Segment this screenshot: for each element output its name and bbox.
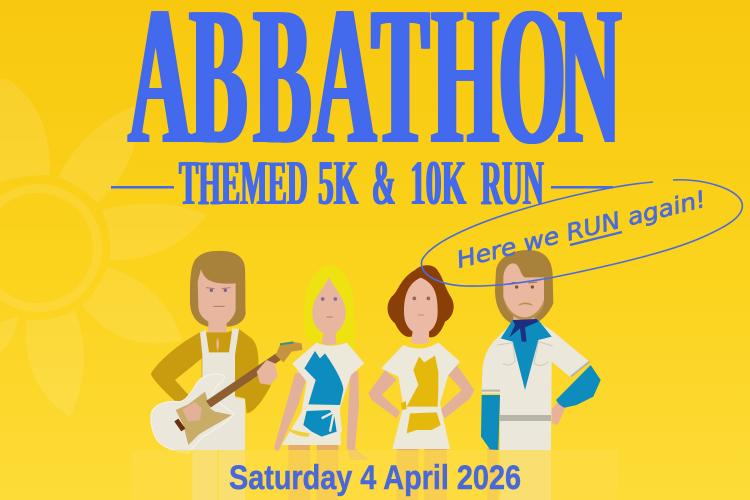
- face and neck: [198, 269, 236, 336]
- hair: [190, 251, 246, 327]
- date band: [132, 450, 618, 500]
- figures: blonde and brunette singers: [274, 264, 474, 500]
- blue shirt and collar: [501, 320, 552, 390]
- yellow stripe: [287, 428, 310, 437]
- legs: [192, 448, 245, 500]
- right cuff: [556, 365, 601, 408]
- slogan underline: [570, 232, 622, 245]
- figure: guitarist: [151, 251, 302, 500]
- date: Saturday 4 April 2026: [229, 459, 521, 497]
- shirt and sleeves: [151, 329, 271, 413]
- face and neck: [312, 277, 346, 345]
- beard and moustache: [503, 297, 544, 320]
- flower watermark: [0, 79, 207, 417]
- brunette singer: [368, 265, 474, 500]
- guitar body: [151, 374, 234, 453]
- eyes and mouth: [206, 288, 230, 306]
- slogan: Here we RUN again!: [454, 187, 709, 274]
- neck: [208, 357, 278, 404]
- tuners: [280, 342, 293, 344]
- eyes and mouth: [321, 297, 337, 317]
- lapels: [497, 342, 553, 365]
- eyes and mouth: [412, 296, 430, 315]
- fretting hand: [257, 360, 278, 385]
- waist tie: [322, 410, 341, 432]
- subtitle text: 10K: [410, 148, 466, 218]
- blue cat print: [303, 351, 343, 437]
- subtitle text: RUN: [481, 148, 544, 218]
- hand: [552, 403, 565, 425]
- neck: [513, 315, 535, 332]
- headstock: [276, 342, 302, 362]
- bridge: [176, 420, 183, 430]
- subtitle text: &: [372, 148, 396, 218]
- suit: [482, 322, 589, 450]
- hair: [388, 265, 454, 337]
- legs: [397, 449, 447, 500]
- arms: [368, 365, 474, 418]
- belt: [500, 415, 551, 421]
- legs: [500, 448, 551, 500]
- blonde singer: [274, 264, 370, 500]
- face and neck: [404, 278, 438, 344]
- hand-drawn ellipse: [422, 180, 742, 286]
- subtitle text: THEMED: [179, 148, 308, 218]
- left cuff: [481, 395, 500, 450]
- guitar: [151, 342, 302, 453]
- figure: bearded man: [481, 250, 601, 500]
- gold cat print: [401, 356, 441, 433]
- arms: [274, 372, 370, 460]
- dress: [282, 342, 364, 445]
- left hand: [487, 448, 498, 500]
- legs: [288, 445, 338, 500]
- subtitle text: [178, 148, 544, 218]
- face: [503, 263, 544, 318]
- sleeve stripes: [482, 362, 589, 391]
- pickguard: [176, 392, 232, 445]
- neck scarf: [509, 319, 538, 342]
- keyhole: [216, 338, 219, 352]
- hair: [304, 264, 355, 362]
- apron: [192, 328, 245, 450]
- subtitle text: 5K: [318, 148, 358, 218]
- title: [127, 0, 622, 185]
- subtitle right rule: [551, 186, 613, 188]
- hair: [495, 250, 553, 323]
- dress: [381, 342, 460, 449]
- strumming hand: [182, 402, 202, 422]
- eyes and brows: [512, 282, 537, 289]
- callout: here we run again: [422, 180, 742, 286]
- subtitle left rule: [111, 186, 174, 188]
